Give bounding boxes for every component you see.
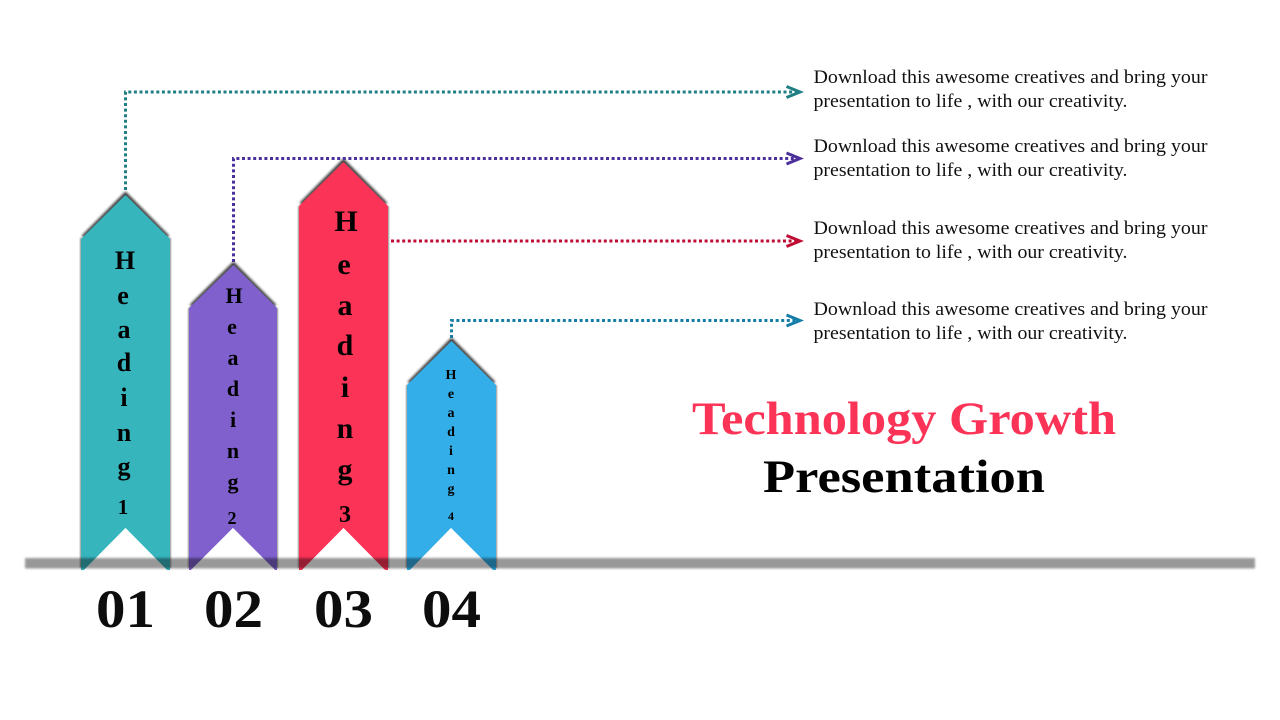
label: heading 1: H <box>115 246 135 275</box>
text block 2: presentation to life , with our creativity. <box>814 161 1128 181</box>
label: heading 1: i <box>120 383 128 412</box>
label: heading 2 <box>225 283 243 528</box>
text block 1: Download this awesome creatives and bring your <box>814 68 1208 88</box>
label: heading 3: d <box>337 329 354 362</box>
label: heading 4: e <box>448 387 454 402</box>
label: heading 2: a <box>228 345 238 370</box>
label: heading 4 <box>446 368 457 523</box>
label: heading 4: i <box>449 444 453 459</box>
label: heading 3 <box>334 205 358 528</box>
label: heading 2: i <box>230 407 236 432</box>
text block 2: Download this awesome creatives and bring your <box>814 137 1208 157</box>
bar 4: blue arrow <box>407 340 496 570</box>
label: heading 2: n <box>227 438 239 463</box>
label: heading 3: e <box>337 248 351 281</box>
baseline shadow band <box>25 558 1255 568</box>
text block 3 <box>814 219 1208 263</box>
label: heading 3: 3 <box>339 502 351 528</box>
label: heading 1 <box>115 246 135 519</box>
title: Technology Growth <box>692 393 1116 445</box>
text block 3: Download this awesome creatives and bring your <box>814 219 1208 239</box>
bar 1: teal arrow <box>81 194 170 570</box>
label: heading 2: H <box>225 283 243 308</box>
bar 2: purple arrow <box>189 264 277 570</box>
label: heading 4: g <box>448 482 454 497</box>
text block 3: presentation to life , with our creativity. <box>814 243 1128 263</box>
connector 2 <box>234 153 800 262</box>
label: heading 3: i <box>341 371 349 404</box>
number 01: 01 <box>96 579 155 639</box>
label: heading 1: e <box>117 281 129 310</box>
label: heading 1: a <box>118 315 130 344</box>
connector 4 <box>452 315 800 338</box>
connector 1 <box>126 86 800 190</box>
label: heading 1: d <box>117 348 132 377</box>
text block 4 <box>814 300 1208 344</box>
text block 1: presentation to life , with our creativity. <box>814 92 1128 112</box>
label: heading 4: n <box>447 463 455 478</box>
label: heading 2: g <box>228 469 238 494</box>
number 02: 02 <box>204 579 263 639</box>
white notches <box>84 528 493 570</box>
text block 4: presentation to life , with our creativity. <box>814 324 1128 344</box>
text block 2 <box>814 137 1208 181</box>
label: heading 3: a <box>338 289 352 322</box>
label: heading 1: n <box>117 418 132 447</box>
number 03: 03 <box>314 579 373 639</box>
label: heading 3: g <box>338 453 352 486</box>
label: heading 4: 4 <box>448 509 454 523</box>
label: heading 2: e <box>227 314 237 339</box>
connector 3 <box>391 236 800 246</box>
label: heading 3: H <box>334 205 358 238</box>
number 04: 04 <box>422 579 481 639</box>
title <box>692 393 1116 503</box>
text block 4: Download this awesome creatives and bring your <box>814 300 1208 320</box>
label: heading 4: H <box>446 368 457 383</box>
text block 1 <box>814 68 1208 112</box>
bar 3: red arrow <box>299 161 388 570</box>
label: heading 1: 1 <box>118 495 128 519</box>
label: heading 3: n <box>337 412 354 445</box>
label: heading 4: a <box>448 406 454 421</box>
label: heading 2: 2 <box>228 508 236 528</box>
label: heading 1: g <box>118 452 130 481</box>
title: Presentation <box>763 451 1045 503</box>
label: heading 4: d <box>447 425 455 440</box>
label: heading 2: d <box>227 376 239 401</box>
